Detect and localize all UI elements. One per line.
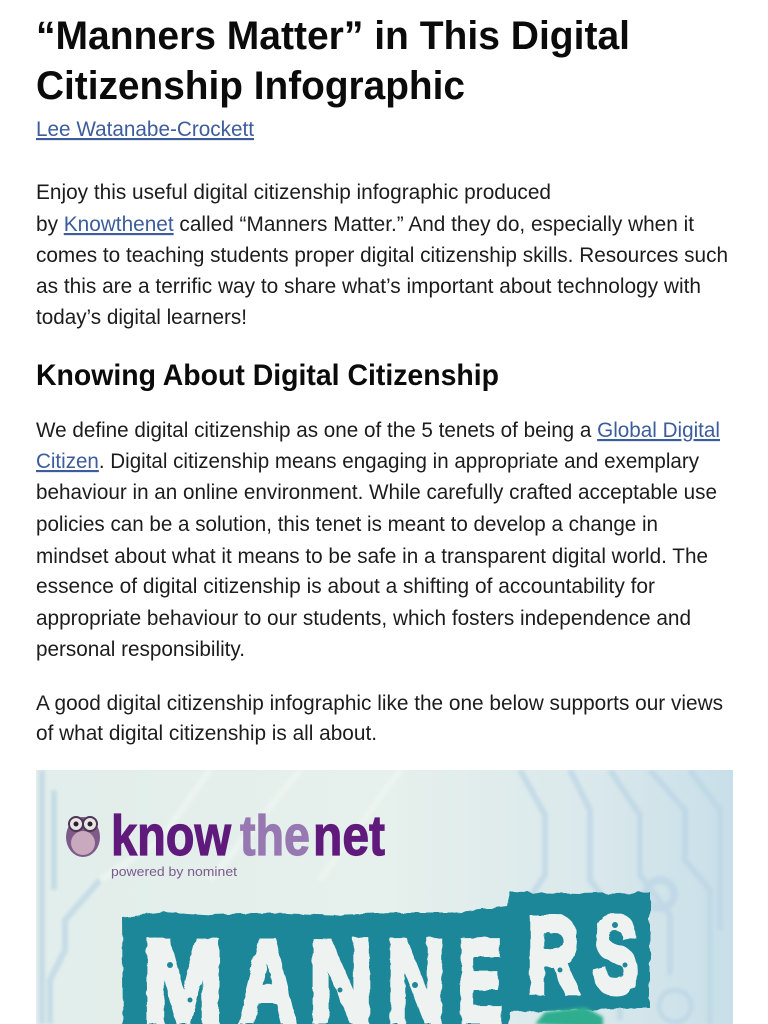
definition paragraph: We define digital citizenship as one of the 5 tenets of being a Global Digital — [36, 418, 720, 442]
author link: Lee Watanabe-Crockett — [36, 117, 254, 141]
closing paragraph — [36, 691, 723, 745]
definition paragraph: appropriate behaviour to our students, which fosters independence and — [36, 606, 691, 630]
definition paragraph: mindset about what it means to be safe in a transparent digital world. The — [36, 544, 708, 568]
knowthenet logo: the — [240, 804, 310, 868]
knowthenet logo — [66, 813, 385, 878]
definition paragraph: essence of digital citizenship is about a shifting of accountability for — [36, 574, 655, 598]
intro paragraph: by Knowthenet called “Manners Matter.” And they do, especially when it — [36, 212, 694, 236]
intro paragraph: as this are a terrific way to share what’s important about technology with — [36, 274, 701, 298]
definition paragraph: personal responsibility. — [36, 637, 245, 661]
definition paragraph: Citizen. Digital citizenship means engaging in appropriate and exemplary — [36, 449, 699, 473]
definition paragraph: policies can be a solution, this tenet is meant to develop a change in — [36, 512, 658, 536]
definition paragraph — [36, 418, 720, 661]
manners banner — [122, 892, 650, 1024]
closing paragraph: A good digital citizenship infographic like the one below supports our views — [36, 691, 723, 715]
icon: owl — [66, 817, 100, 857]
manners banner: R — [527, 894, 579, 1015]
knowthenet logo: powered by nominet — [111, 864, 237, 879]
intro paragraph — [36, 180, 728, 329]
title: Citizenship Infographic — [36, 64, 465, 108]
knowthenet logo: net — [313, 804, 385, 868]
distressed specks — [167, 922, 628, 1002]
definition paragraph: behaviour in an online environment. While carefully crafted acceptable use — [36, 480, 717, 504]
intro paragraph: comes to teaching students proper digital citizenship skills. Resources such — [36, 243, 728, 267]
title — [36, 14, 630, 108]
section heading: Knowing About Digital Citizenship — [36, 359, 499, 392]
manners banner: S — [593, 894, 638, 1015]
title: “Manners Matter” in This Digital — [36, 14, 630, 58]
intro paragraph: today’s digital learners! — [36, 305, 247, 329]
infographic preview image — [36, 770, 733, 1024]
intro paragraph: Enjoy this useful digital citizenship infographic produced — [36, 180, 551, 204]
closing paragraph: of what digital citizenship is all about. — [36, 721, 377, 745]
knowthenet logo: know — [111, 804, 232, 868]
